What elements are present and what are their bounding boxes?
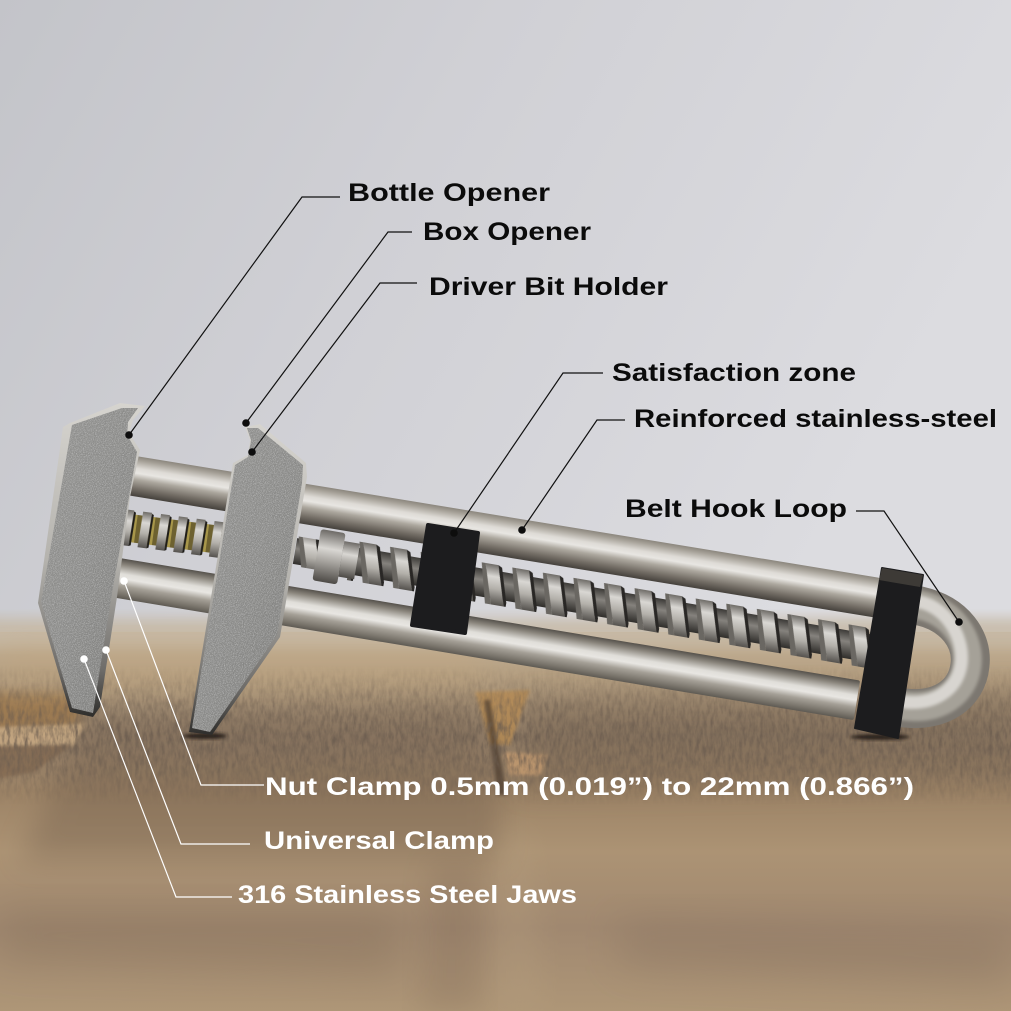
end black block bbox=[855, 568, 923, 738]
background wall bbox=[0, 0, 1011, 640]
callout: Box Opener: Box Opener bbox=[423, 218, 591, 246]
callout: Driver Bit Holder bbox=[248, 273, 668, 456]
callout: Reinforced stainless-steel bbox=[518, 405, 997, 534]
spring bbox=[120, 508, 228, 559]
callout: Belt Hook Loop: Belt Hook Loop bbox=[625, 495, 847, 523]
u-bend belt hook loop bbox=[862, 594, 970, 709]
callout: Box Opener bbox=[242, 218, 591, 427]
lead screw bbox=[291, 525, 872, 674]
callout: Universal Clamp: Universal Clamp bbox=[264, 827, 494, 855]
left jaw bbox=[38, 403, 145, 717]
callout: Satisfaction zone bbox=[450, 359, 856, 537]
callout: Bottle Opener bbox=[125, 179, 550, 439]
upper rod bbox=[119, 454, 880, 617]
callout: Driver Bit Holder: Driver Bit Holder bbox=[429, 273, 668, 301]
contact shadows bbox=[183, 733, 910, 740]
callout: Belt Hook Loop bbox=[625, 495, 963, 626]
callout: 316 Stainless Steel Jaws: 316 Stainless Steel Jaws bbox=[238, 881, 577, 909]
callout: Bottle Opener: Bottle Opener bbox=[348, 179, 550, 207]
right jaw bbox=[189, 424, 307, 735]
callout: Satisfaction zone: Satisfaction zone bbox=[612, 359, 856, 387]
centre black block bbox=[412, 525, 478, 633]
callout: Nut Clamp: Nut Clamp 0.5mm (0.019”) to 22mm (0.866”) bbox=[265, 773, 914, 801]
wooden table bbox=[0, 618, 1011, 1011]
callout: 316 Stainless Steel Jaws bbox=[80, 655, 577, 909]
callout: Universal Clamp bbox=[102, 646, 494, 855]
lower rod bbox=[109, 557, 860, 720]
callout: Nut Clamp bbox=[120, 577, 914, 801]
wrench tool bbox=[38, 403, 970, 740]
callout: Reinforced stainless-steel: Reinforced stainless-steel bbox=[634, 405, 997, 433]
